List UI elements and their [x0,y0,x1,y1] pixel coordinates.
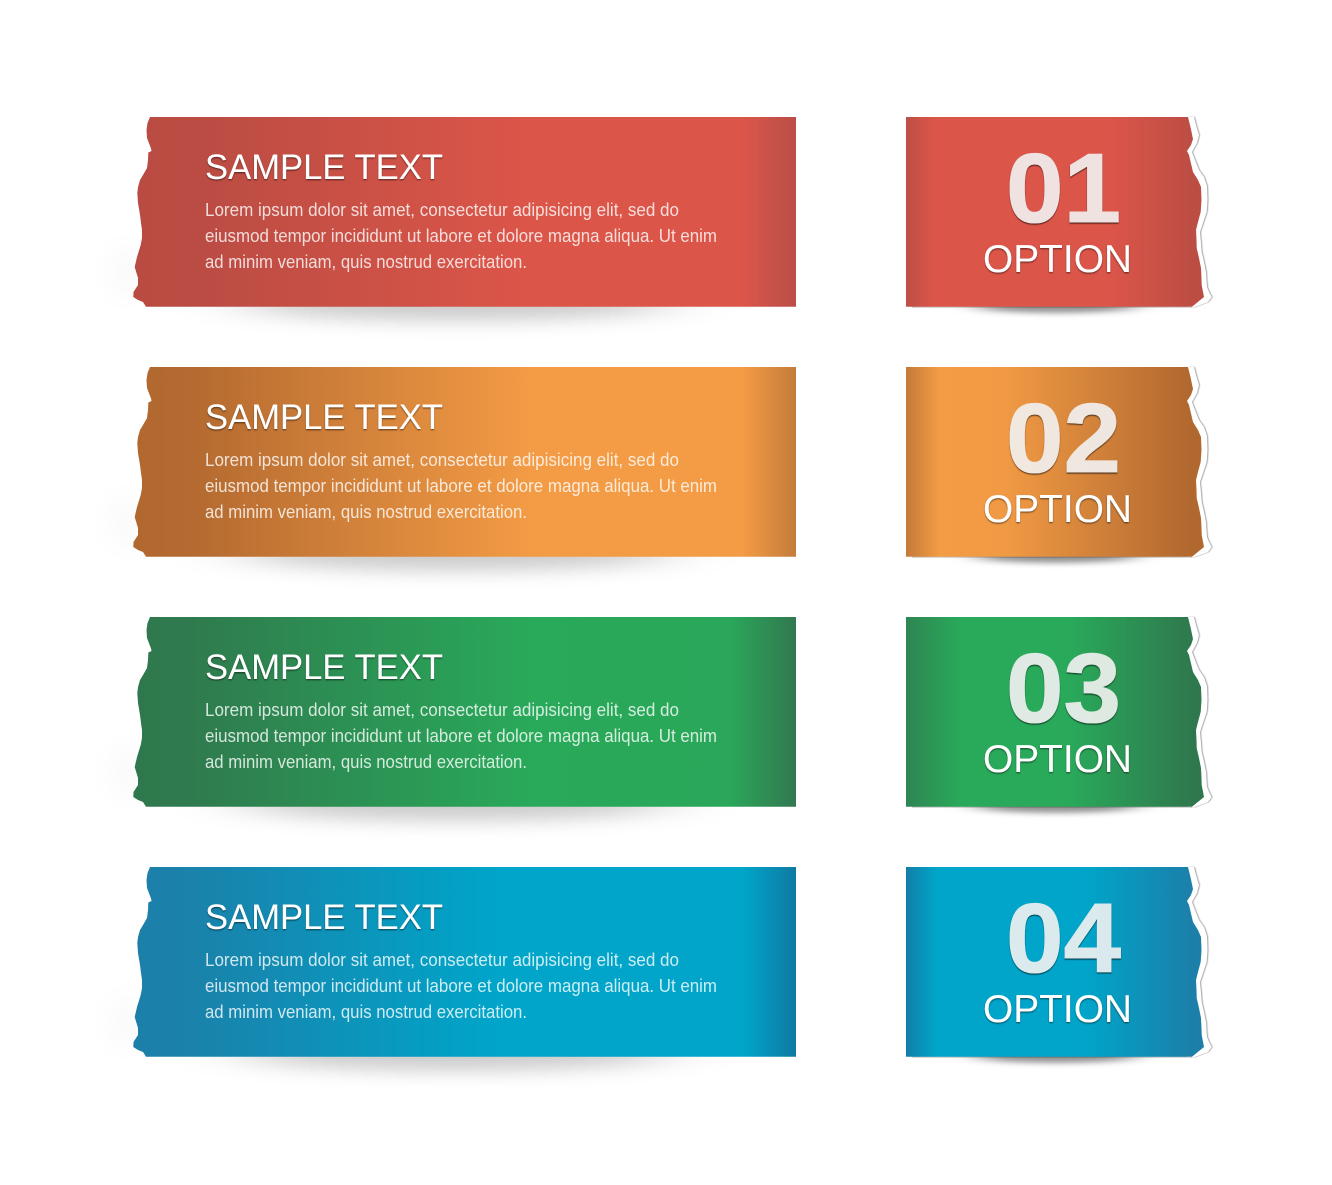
bottom edge line [912,806,1192,808]
body text: Lorem ipsum dolor sit amet, consectetur adipisicing elit, sed do [205,950,679,970]
option label: OPTION [983,738,1132,781]
option label: OPTION [983,488,1132,531]
body text: eiusmod tempor incididunt ut labore et dolore magna aliqua. Ut enim [205,226,717,246]
shadow under tag [976,801,1136,813]
option label: OPTION [983,988,1132,1031]
shadow left of banner [111,996,139,1048]
shadow under banner [240,537,670,571]
shadow left of banner [111,746,139,798]
panel: option 02 [906,367,1212,563]
number: 03 [1006,633,1121,743]
body text [205,950,717,1022]
body text: eiusmod tempor incididunt ut labore et dolore magna aliqua. Ut enim [205,476,717,496]
heading: SAMPLE TEXT [205,648,443,687]
torn paper edge [1188,367,1212,557]
tag shape [906,867,1204,1057]
heading: SAMPLE TEXT [205,898,443,937]
shadow left of banner [111,246,139,298]
body text: eiusmod tempor incididunt ut labore et dolore magna aliqua. Ut enim [205,976,717,996]
heading: SAMPLE TEXT [205,148,443,187]
shadow under tag [976,1051,1136,1063]
panel: option 04 [906,867,1212,1063]
body text: Lorem ipsum dolor sit amet, consectetur adipisicing elit, sed do [205,450,679,470]
tag shape [906,617,1204,807]
banner shape [133,367,796,557]
body text [205,450,717,522]
body text: ad minim veniam, quis nostrud exercitation. [205,252,527,272]
panel: banner 3 [111,617,796,821]
body text: ad minim veniam, quis nostrud exercitation. [205,752,527,772]
bottom edge line [912,306,1192,308]
number: 04 [1006,883,1121,993]
panel: banner 2 [111,367,796,571]
shadow under banner [240,287,670,321]
torn paper edge [1188,867,1212,1057]
body text: Lorem ipsum dolor sit amet, consectetur adipisicing elit, sed do [205,200,679,220]
number: 02 [1006,383,1121,493]
bottom edge line [912,1056,1192,1058]
panel: option 03 [906,617,1212,813]
shadow under banner [240,1037,670,1071]
banner shape [133,117,796,307]
shadow under banner [240,787,670,821]
banner shape [133,617,796,807]
panel: banner 1 [111,117,796,321]
panel: option 01 [906,117,1212,313]
body text: ad minim veniam, quis nostrud exercitation. [205,502,527,522]
panel: banner 4 [111,867,796,1071]
torn paper edge [1188,117,1212,307]
body text: ad minim veniam, quis nostrud exercitation. [205,1002,527,1022]
body text: Lorem ipsum dolor sit amet, consectetur adipisicing elit, sed do [205,700,679,720]
bottom edge line [912,556,1192,558]
torn paper edge [1188,617,1212,807]
body text [205,700,717,772]
body text: eiusmod tempor incididunt ut labore et dolore magna aliqua. Ut enim [205,726,717,746]
number: 01 [1006,133,1121,243]
tag shape [906,117,1204,307]
body text [205,200,717,272]
banner shape [133,867,796,1057]
shadow left of banner [111,496,139,548]
option label: OPTION [983,238,1132,281]
heading: SAMPLE TEXT [205,398,443,437]
tag shape [906,367,1204,557]
shadow under tag [976,301,1136,313]
shadow under tag [976,551,1136,563]
